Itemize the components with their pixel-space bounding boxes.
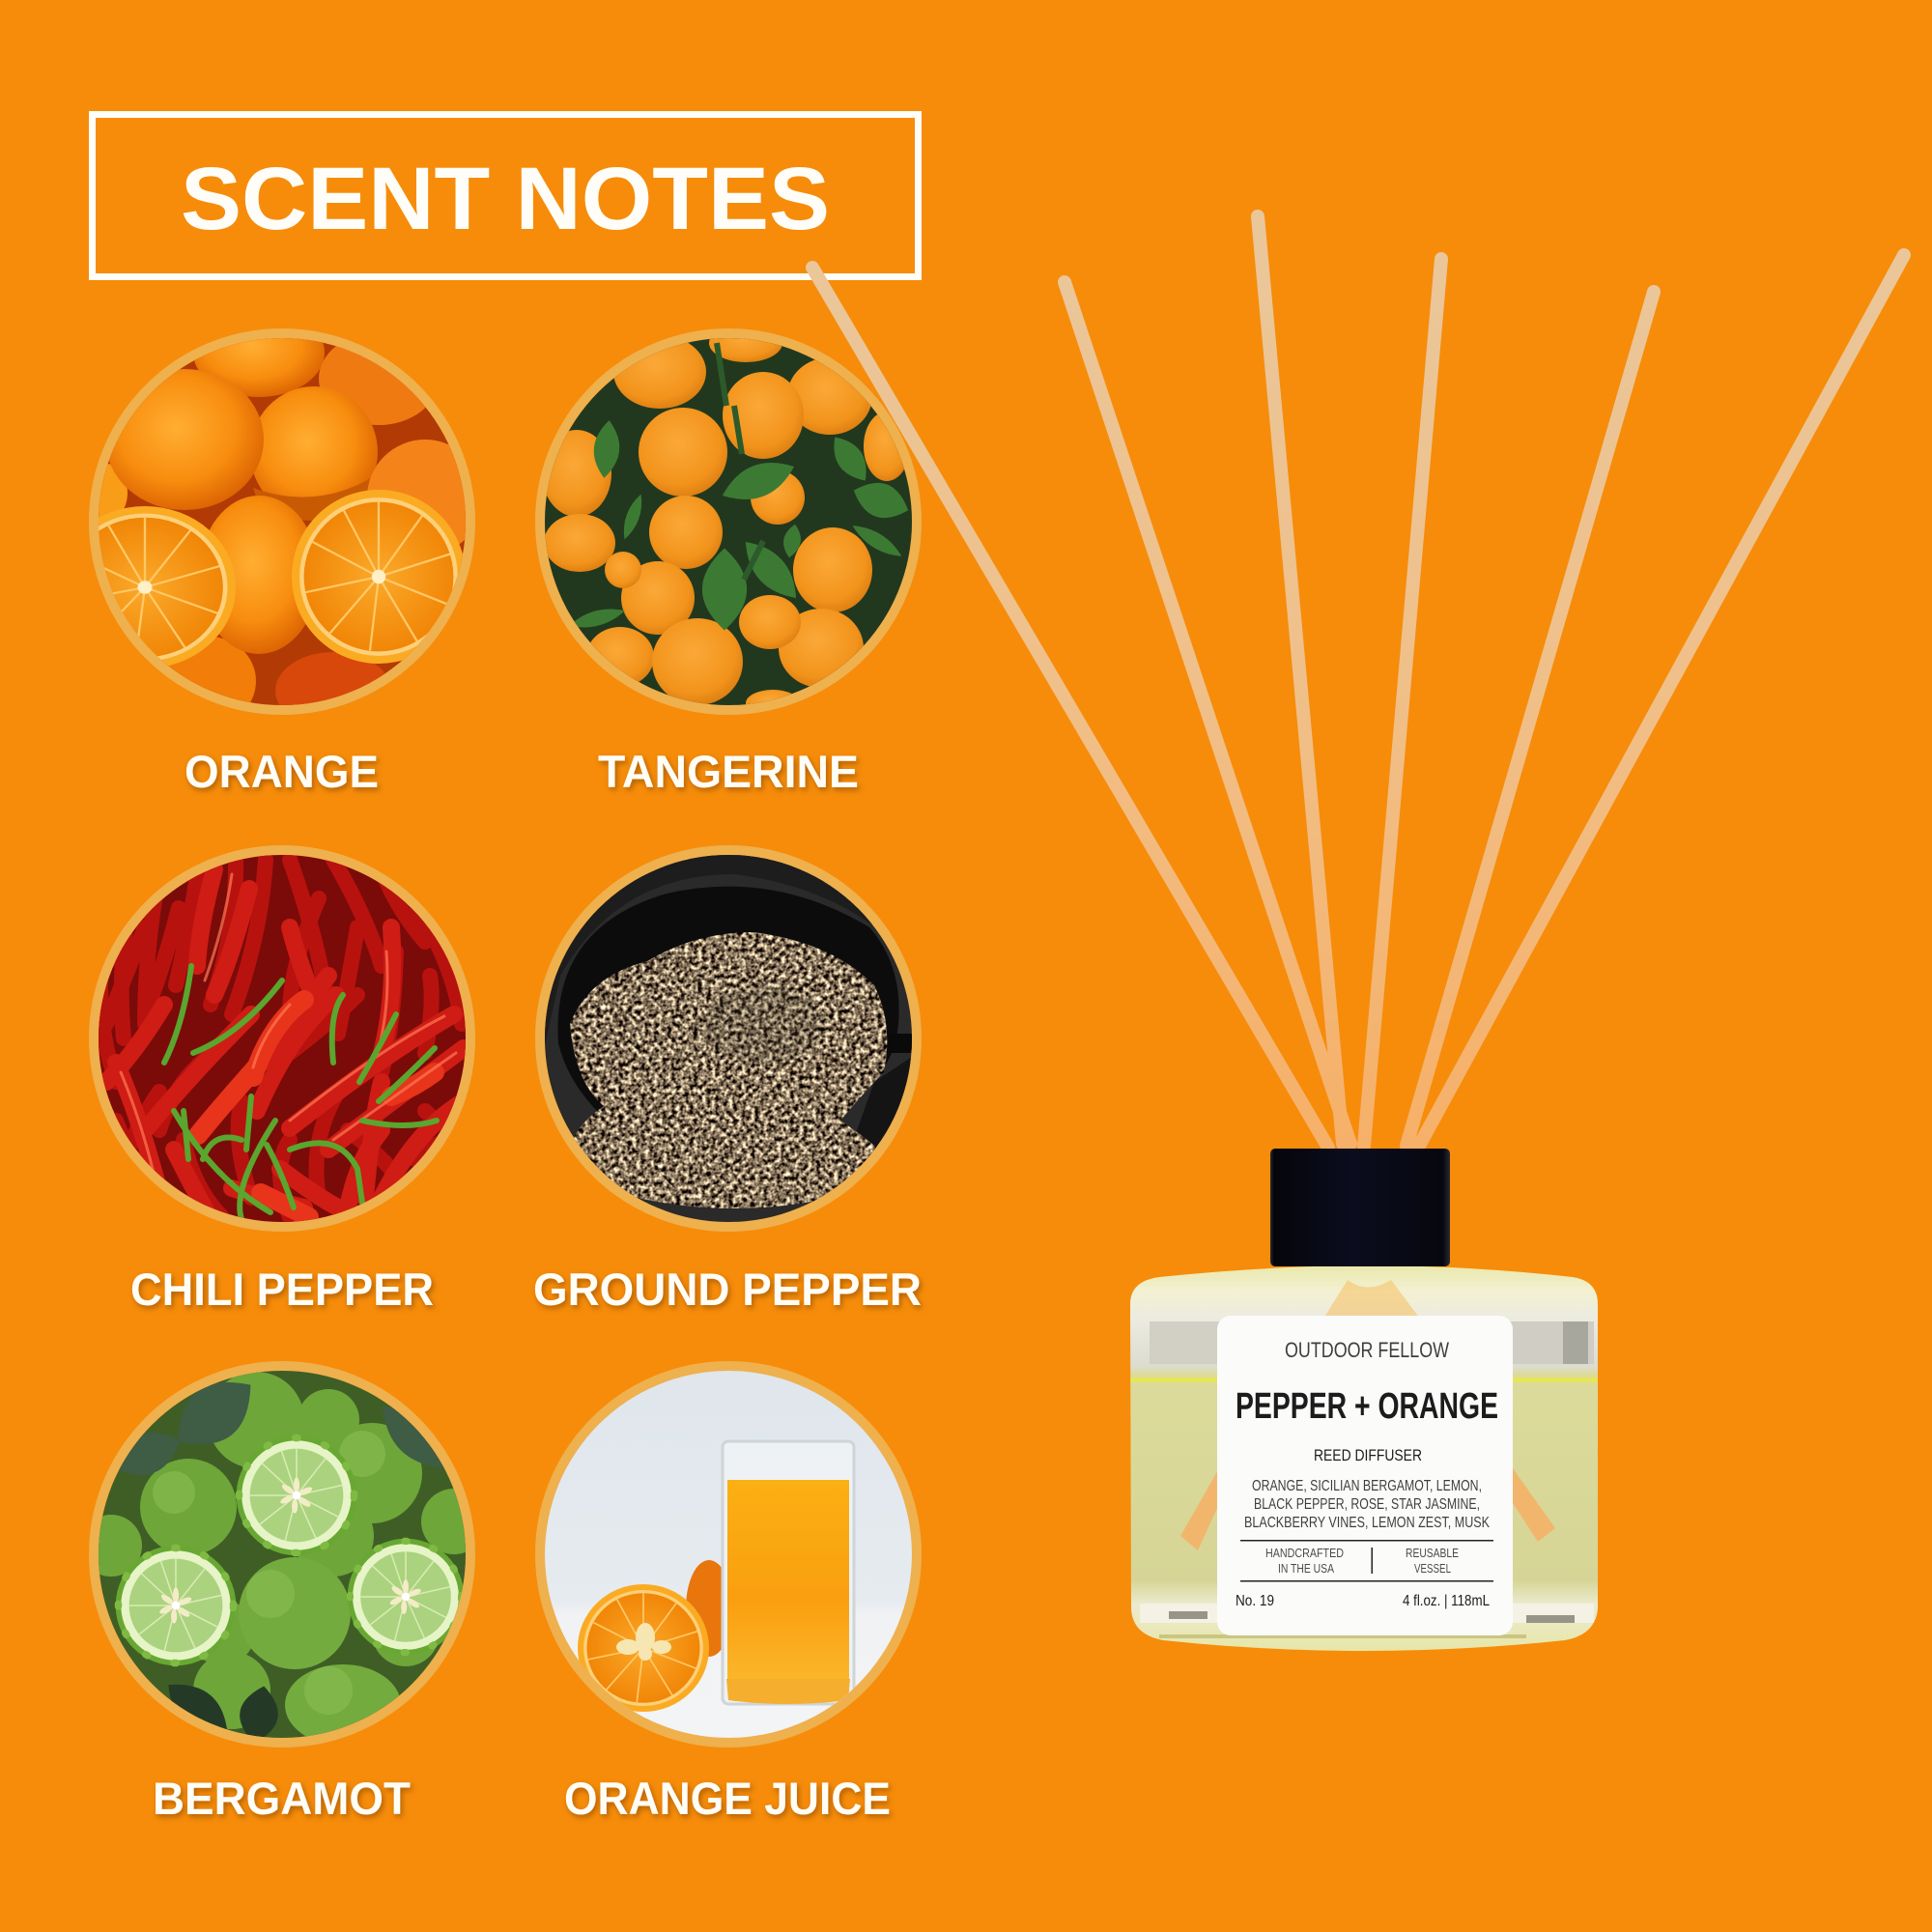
product label: 4 fl.oz. | 118mL <box>1403 1593 1490 1609</box>
note: orange juice <box>540 1366 918 1744</box>
title box: scent notes <box>93 114 918 276</box>
product label <box>1217 1316 1513 1635</box>
note: bergamot <box>80 1363 487 1749</box>
product label: HANDCRAFTED <box>1265 1547 1344 1560</box>
title box: scent notes: SCENT NOTES <box>181 150 830 248</box>
product label: VESSEL <box>1414 1562 1451 1576</box>
product label: REUSABLE <box>1406 1547 1459 1560</box>
label: chili pepper: CHILI PEPPER <box>130 1264 434 1315</box>
label: orange: ORANGE <box>185 746 379 797</box>
product label: PEPPER + ORANGE <box>1236 1386 1498 1427</box>
product label: OUTDOOR FELLOW <box>1285 1338 1449 1362</box>
product label: REED DIFFUSER <box>1314 1446 1422 1464</box>
label: ground pepper: GROUND PEPPER <box>533 1264 922 1315</box>
product label: ORANGE, SICILIAN BERGAMOT, LEMON, <box>1252 1478 1482 1494</box>
label: bergamot: BERGAMOT <box>153 1773 411 1824</box>
product label: BLACKBERRY VINES, LEMON ZEST, MUSK <box>1244 1515 1491 1531</box>
reed diffuser product <box>812 216 1904 1660</box>
bottle glass <box>1130 1264 1600 1660</box>
note: tangerine <box>540 324 918 717</box>
product label: IN THE USA <box>1278 1562 1335 1576</box>
label: tangerine: TANGERINE <box>598 746 859 797</box>
black cap <box>1270 1149 1450 1266</box>
product label: No. 19 <box>1236 1593 1274 1609</box>
note: chili pepper <box>94 850 470 1227</box>
reeds <box>812 216 1904 1148</box>
note: ground pepper <box>540 850 918 1236</box>
label: orange juice: ORANGE JUICE <box>564 1773 891 1824</box>
note: orange <box>89 328 475 715</box>
product label: BLACK PEPPER, ROSE, STAR JASMINE, <box>1254 1496 1480 1513</box>
